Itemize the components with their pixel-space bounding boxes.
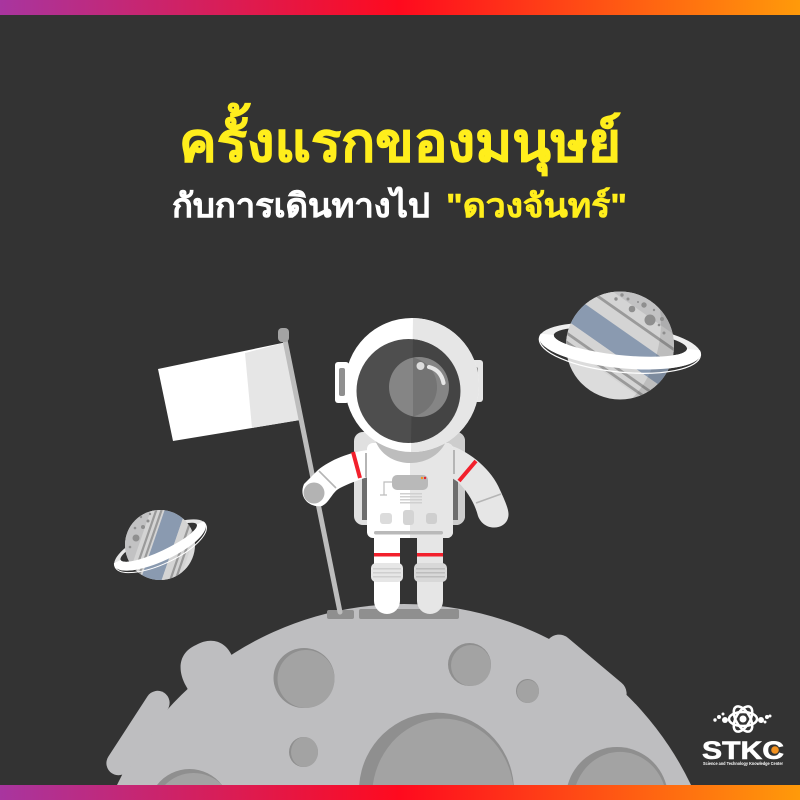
subtitle: กับการเดินทางไป — [172, 186, 430, 224]
neck shadow — [374, 436, 448, 463]
small planet bands — [125, 510, 192, 580]
title: ครั้งแรกของมนุษย์ — [179, 103, 621, 177]
left leg — [371, 530, 403, 614]
small ringed planet — [114, 510, 207, 580]
small ring behind planet — [108, 509, 212, 581]
gloved hand — [304, 482, 324, 504]
ring in front of planet — [538, 334, 702, 374]
subtitle: "ดวงจันทร์" — [446, 187, 627, 224]
top gradient bar — [0, 0, 800, 15]
STKC logo — [702, 703, 784, 766]
right arm — [452, 446, 509, 528]
logo wordmark: STKC — [702, 737, 784, 765]
bottom gradient bar — [0, 785, 800, 800]
ring behind planet — [537, 316, 703, 376]
helmet — [345, 318, 479, 452]
flag on pole — [158, 328, 354, 619]
small ring in front of planet — [114, 521, 207, 574]
planet body — [566, 292, 674, 400]
logo dots — [713, 712, 772, 724]
planet bands — [566, 292, 674, 398]
logo tagline: Science and Technology Knowledge Center — [703, 761, 783, 766]
small planet body — [125, 510, 195, 580]
large ringed planet — [538, 292, 702, 400]
chest buttons — [380, 513, 392, 524]
craters — [157, 643, 666, 785]
visor — [356, 339, 460, 443]
astronaut — [302, 318, 509, 619]
logo atom icon — [729, 703, 757, 735]
torso — [365, 443, 455, 538]
helmet ear pieces — [335, 362, 349, 403]
left arm — [302, 450, 368, 506]
moon surface — [102, 604, 691, 785]
foot platform — [359, 609, 459, 619]
chest control panel — [392, 475, 428, 490]
visor reflection — [389, 357, 449, 417]
backpack — [354, 432, 465, 525]
moon ridges — [102, 629, 632, 785]
right leg — [414, 530, 447, 614]
subtitle — [172, 186, 627, 224]
